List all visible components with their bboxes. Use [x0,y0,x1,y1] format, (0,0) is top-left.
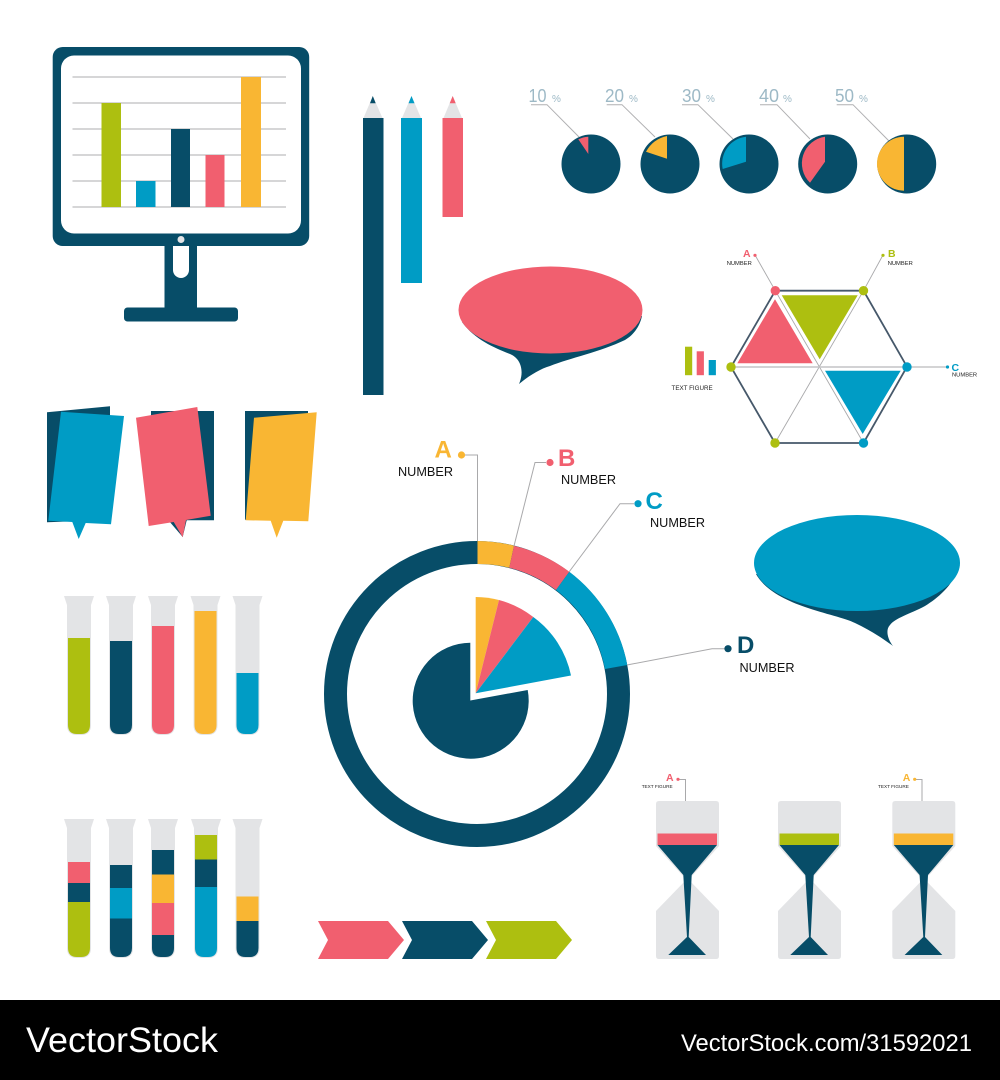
hourglass: pink: A [666,772,674,784]
percent pie: 20 [605,85,700,194]
callout C [569,488,705,572]
arrow: navy [402,921,488,959]
speech bubble: pink [458,266,642,384]
hexagon diagram: NUMBER [952,372,977,378]
callout D: NUMBER [740,661,794,675]
hexagon diagram: C [952,362,960,374]
callout A [398,437,478,541]
percent pie: 50: % [859,94,868,105]
footer bar: VectorStock [26,1021,219,1060]
note card: yellow [245,411,317,538]
note card: pink [136,407,214,537]
callout B: NUMBER [561,473,616,487]
footer bar: VectorStock.com/31592021 [681,1030,972,1057]
donut chart [336,541,627,836]
hourglass: yellow [878,772,955,959]
pencil: pink [442,96,463,217]
callout C: NUMBER [650,516,705,530]
note card: blue [47,406,124,539]
percent pie: 40: % [783,94,792,105]
hourglass: pink: TEXT FIGURE [642,784,673,789]
hexagon diagram: B [888,248,896,260]
speech bubble: blue [754,515,960,646]
hexagon diagram: NUMBER [888,261,913,267]
percent pie: 40: 40 [759,85,779,106]
monitor with bar chart [53,47,309,322]
test tubes: top row [64,596,262,741]
percent pie: 30: 30 [682,85,701,106]
pencil: blue [401,96,422,283]
footer bar [0,1000,1000,1080]
hourglass: pink [642,772,719,959]
percent pie: 10 [528,85,620,194]
arrow: pink [318,921,404,959]
percent pie: 40 [759,85,857,194]
inner pie chart [413,597,571,759]
callout B: B [558,445,575,472]
hourglass: yellow: A [903,772,911,784]
percent pie: 20: 20 [605,85,624,106]
hexagon diagram: NUMBER [727,261,752,267]
hourglass: green [778,801,841,959]
percent pie: 10: 10 [528,85,546,106]
hexagon diagram: A [743,248,751,260]
arrow: green [486,921,572,959]
callout D: D [737,632,754,659]
callout A: A [434,437,452,464]
hexagon diagram [726,248,977,448]
percent pie: 30: % [706,94,715,105]
callout C: C [646,488,663,515]
text figure mini bars: TEXT FIGURE [672,385,713,392]
callout A: NUMBER [398,465,453,479]
percent pie: 10: % [552,94,561,105]
hourglass: yellow: TEXT FIGURE [878,784,909,789]
percent pie: 30 [682,85,778,194]
percent pie: 50 [835,85,936,194]
callout B [514,445,616,546]
callout D [627,632,794,675]
percent pie: 50: 50 [835,85,854,106]
text figure mini bars [672,347,716,392]
pencil: navy [363,96,384,395]
percent pie: 20: % [629,94,638,105]
test tubes: bottom row [64,819,262,962]
